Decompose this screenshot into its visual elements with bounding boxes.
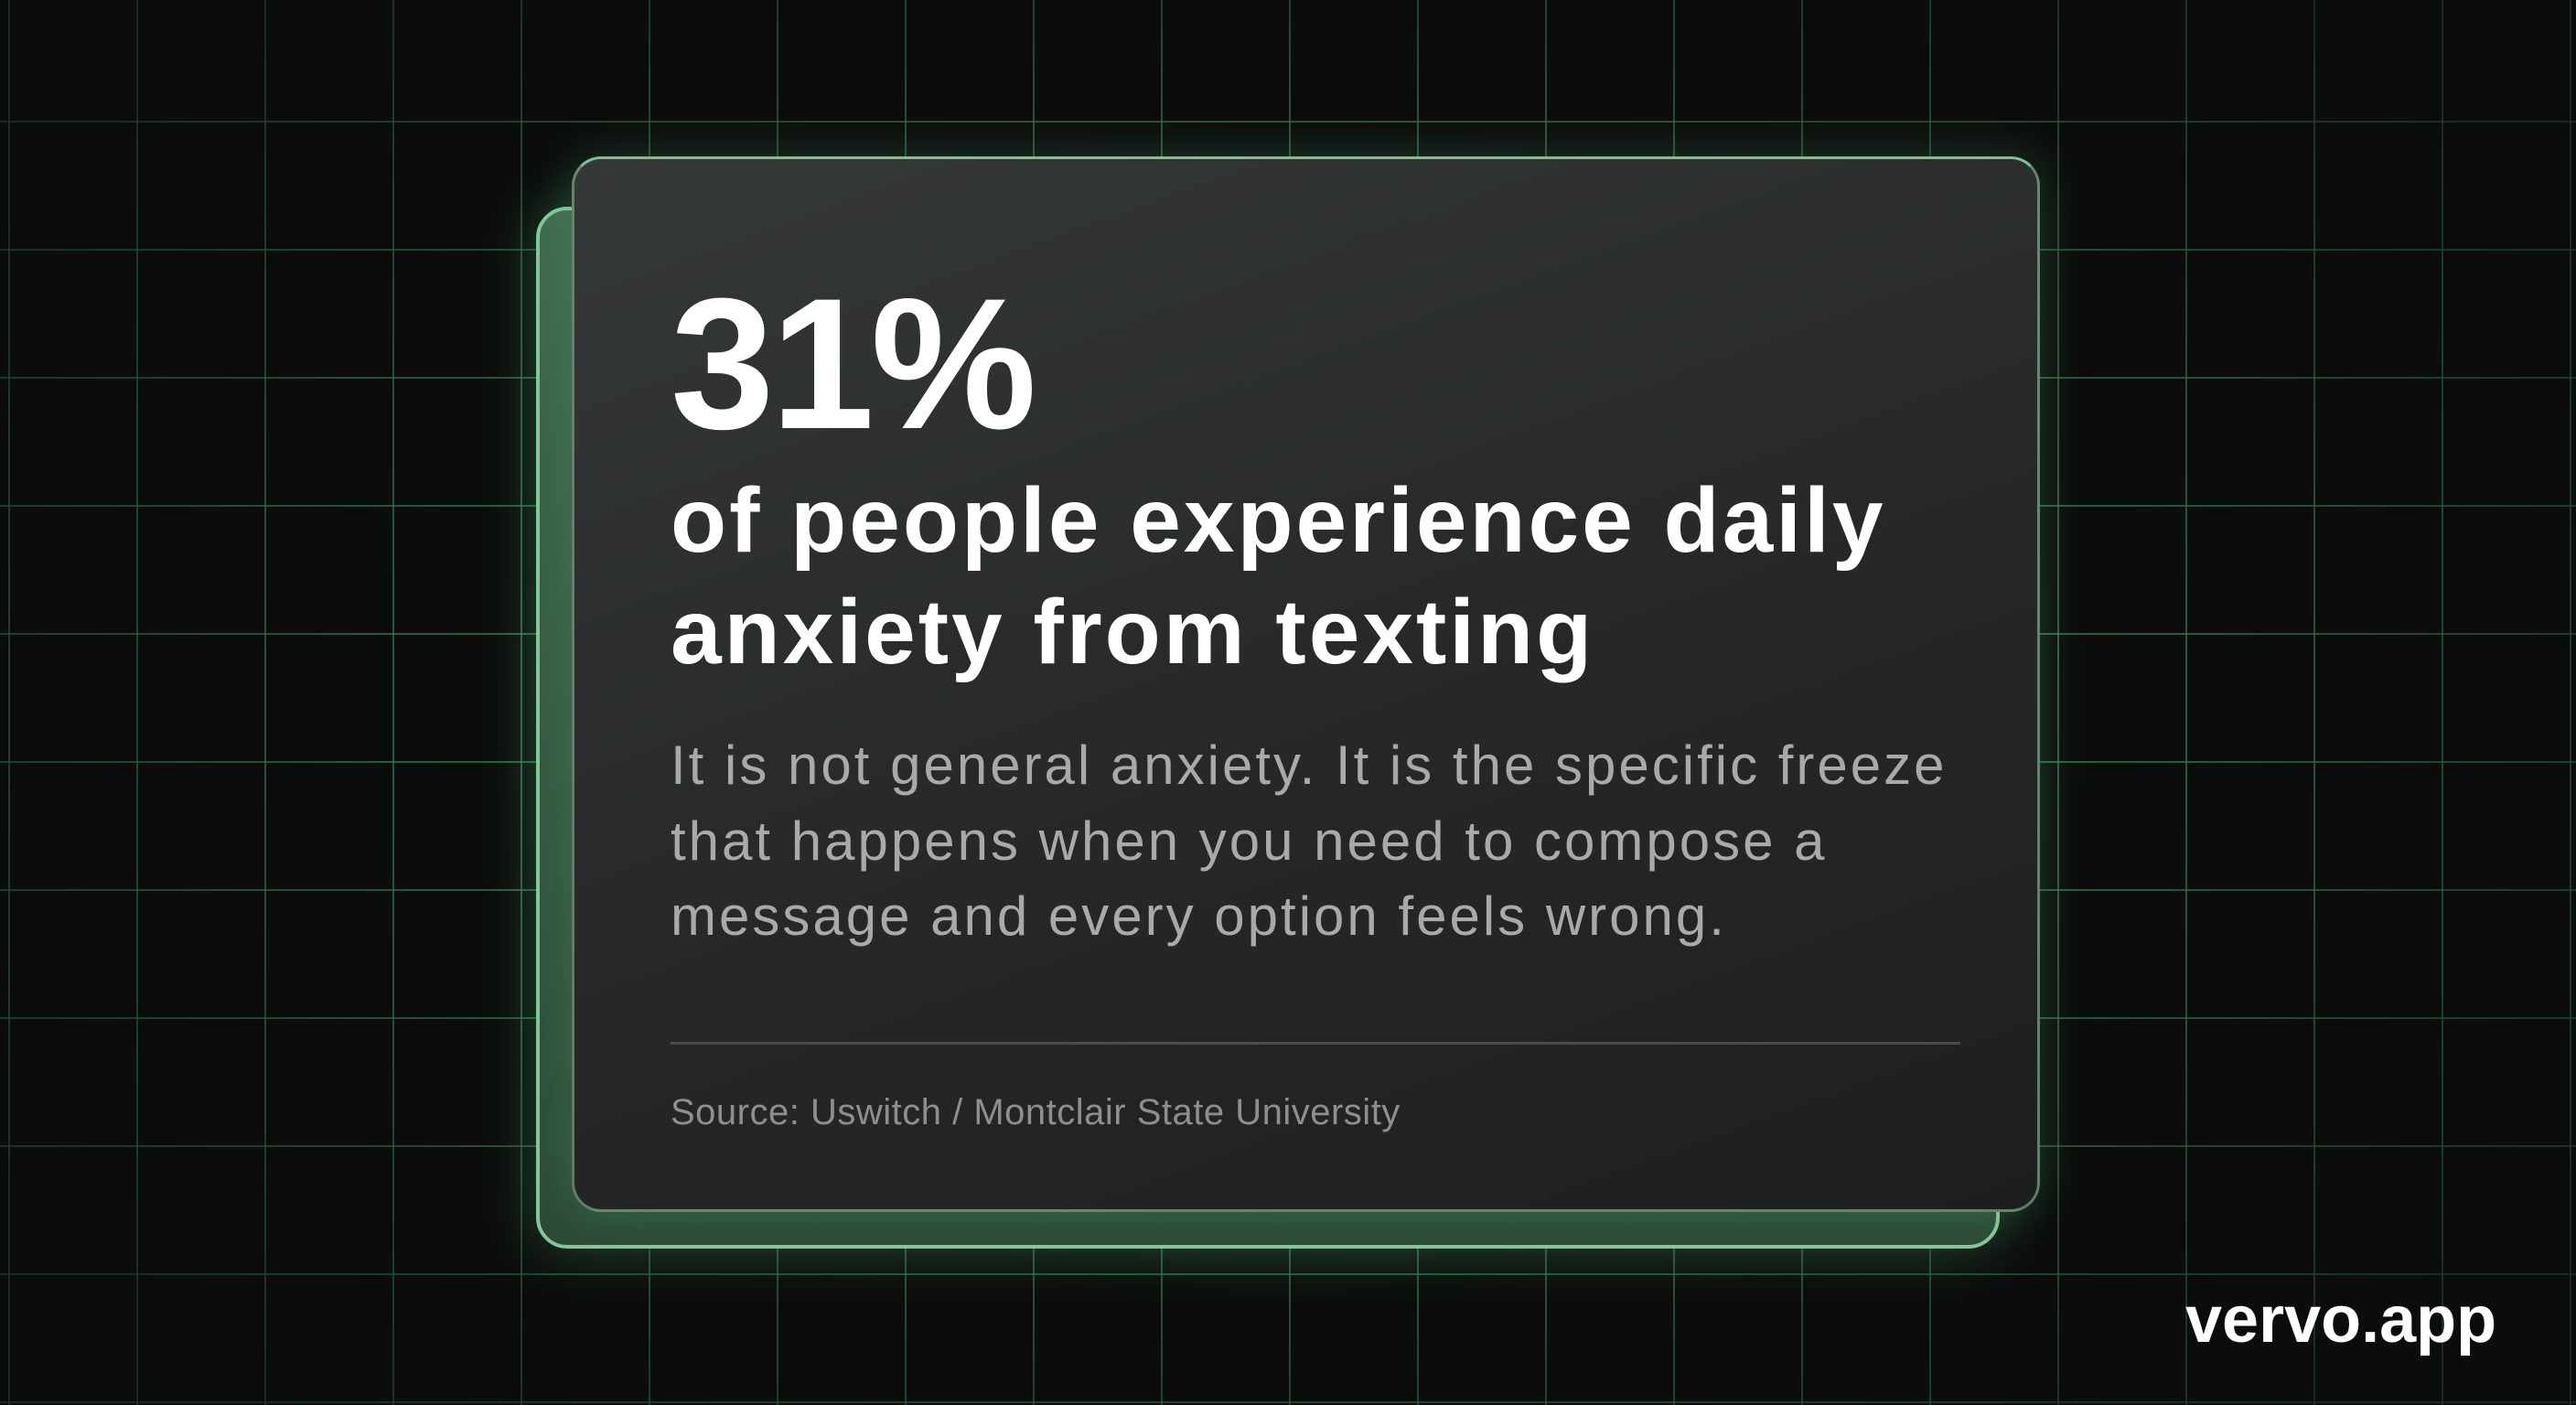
divider [671, 1042, 1960, 1045]
big stat 31%: 31% [671, 260, 1033, 468]
headline [671, 469, 1885, 683]
body text: that happens when you need to compose a [671, 810, 1828, 871]
source: Source: Uswitch / Montclair State University [671, 1092, 1401, 1132]
body text: message and every option feels wrong. [671, 885, 1727, 947]
body text: It is not general anxiety. It is the specific freeze [671, 735, 1947, 796]
front card [572, 156, 2040, 1212]
brand footer: vervo.app [2185, 1283, 2496, 1357]
body text [671, 735, 1947, 947]
headline: anxiety from texting [671, 581, 1594, 683]
back card [536, 207, 2000, 1249]
headline: of people experience daily [671, 469, 1885, 572]
